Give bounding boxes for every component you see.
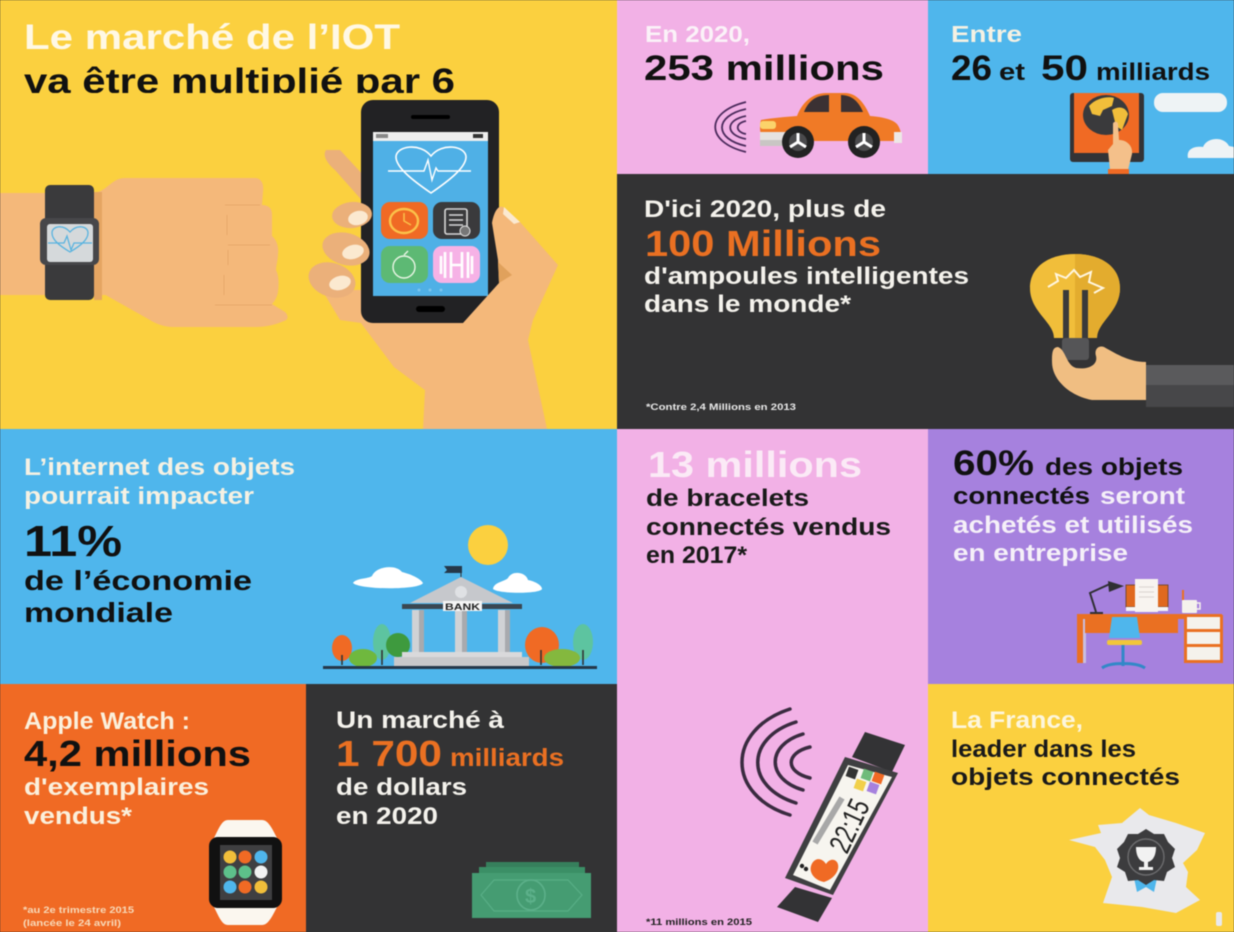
text: market value: Un marché à xyxy=(336,707,505,734)
text: bulbs: 100 Millions xyxy=(645,223,881,264)
panel: connected cars xyxy=(617,0,928,174)
text: market value xyxy=(336,707,564,830)
panel: world economy xyxy=(0,429,617,684)
text: objects count: Entre xyxy=(951,21,1022,47)
footnote xyxy=(23,905,134,928)
text: market value: milliards xyxy=(450,744,564,772)
footnote: *au 2e trimestre 2015 xyxy=(23,905,134,915)
text: Apple Watch: Apple Watch : xyxy=(24,708,190,735)
text: Apple Watch: vendus* xyxy=(24,803,133,830)
text: objects count xyxy=(951,21,1210,88)
panel: connected bracelets xyxy=(617,429,928,932)
text: economy xyxy=(24,454,295,628)
icon: phone held in hand xyxy=(304,100,558,429)
text: bracelets: en 2017* xyxy=(646,542,748,569)
icon: banknotes xyxy=(472,862,591,918)
text: Apple Watch: 4,2 millions xyxy=(24,733,251,774)
icon: map of France with trophy badge xyxy=(1069,808,1222,926)
icon: desk xyxy=(1077,579,1223,668)
text: economy: 11% xyxy=(24,517,122,566)
text: bracelets: 13 millions xyxy=(648,444,862,485)
text: bracelets xyxy=(646,444,891,569)
text: enterprise: des objets xyxy=(1045,454,1183,481)
text: enterprise: seront xyxy=(1100,483,1185,510)
text: Apple Watch xyxy=(24,708,251,830)
text: market value: 1 700 xyxy=(336,733,442,774)
footnote: *Contre 2,4 Millions en 2013 xyxy=(646,402,796,412)
title: Le marché de l’IOT xyxy=(24,18,400,57)
text: objects count: 26 xyxy=(951,49,992,88)
panel: IOT market xyxy=(0,0,617,429)
text: objects count: 50 xyxy=(1041,49,1088,88)
text: cars: 253 millions xyxy=(644,49,884,88)
panel: enterprise objects xyxy=(928,429,1234,684)
icon: signal waves xyxy=(742,709,810,815)
text: economy: L’internet des objets xyxy=(24,454,295,481)
text: bulbs: d'ampoules intelligentes xyxy=(644,263,969,290)
icon: wrist with watch xyxy=(0,178,288,327)
title: va être multiplié par 6 xyxy=(24,62,455,101)
text: enterprise: connectés xyxy=(953,483,1090,510)
text: Apple Watch: d'exemplaires xyxy=(24,774,209,801)
text: France: leader dans les xyxy=(951,736,1136,763)
text: market value: de dollars xyxy=(336,774,467,801)
text: bracelets: connectés vendus xyxy=(646,514,891,541)
icon: banknotes: $ xyxy=(525,886,536,908)
text: economy: pourrait impacter xyxy=(24,483,254,510)
text: enterprise: en entreprise xyxy=(953,540,1128,567)
footnote: *11 millions en 2015 xyxy=(646,917,752,927)
panel: connected objects xyxy=(928,0,1234,174)
panel: smart bulbs xyxy=(617,174,1234,429)
icon: fitness bracelet xyxy=(777,732,905,922)
text: economy: de l’économie xyxy=(24,565,252,596)
icon: clouds xyxy=(1154,93,1234,158)
clock time: 22:15 xyxy=(823,794,877,858)
text: market value: en 2020 xyxy=(336,803,438,830)
footnote: (lancée le 24 avril) xyxy=(23,918,121,928)
panel: Apple Watch xyxy=(0,684,306,932)
title xyxy=(24,22,454,94)
bank label xyxy=(443,601,482,612)
text: France xyxy=(951,707,1180,791)
icon: smartwatch xyxy=(209,820,282,925)
icon: signal waves xyxy=(715,102,746,152)
panel: market value xyxy=(306,684,617,932)
icon: tablet with globe and finger xyxy=(1070,93,1144,174)
text: bulbs: dans le monde* xyxy=(644,291,852,318)
icon: bank scene xyxy=(323,525,597,669)
panel: France leader xyxy=(928,684,1234,932)
text: bulbs: D'ici 2020, plus de xyxy=(644,196,886,223)
text: France: objets connectés xyxy=(951,764,1180,791)
text: objects count: et xyxy=(999,59,1025,86)
text: economy: mondiale xyxy=(24,597,173,628)
icon: light bulb in hand xyxy=(1030,254,1234,407)
icon: orange car xyxy=(760,93,902,158)
text: enterprise xyxy=(953,444,1193,567)
text: France: La France, xyxy=(951,707,1083,734)
text: enterprise: 60% xyxy=(953,444,1034,483)
text: bulbs xyxy=(644,196,969,318)
bank label: BANK xyxy=(445,602,481,612)
text: bracelets: de bracelets xyxy=(646,485,809,512)
text: cars: En 2020, xyxy=(645,21,750,47)
text: objects count: milliards xyxy=(1096,59,1210,86)
text: enterprise: achetés et utilisés xyxy=(953,512,1193,539)
text: cars xyxy=(644,21,884,88)
